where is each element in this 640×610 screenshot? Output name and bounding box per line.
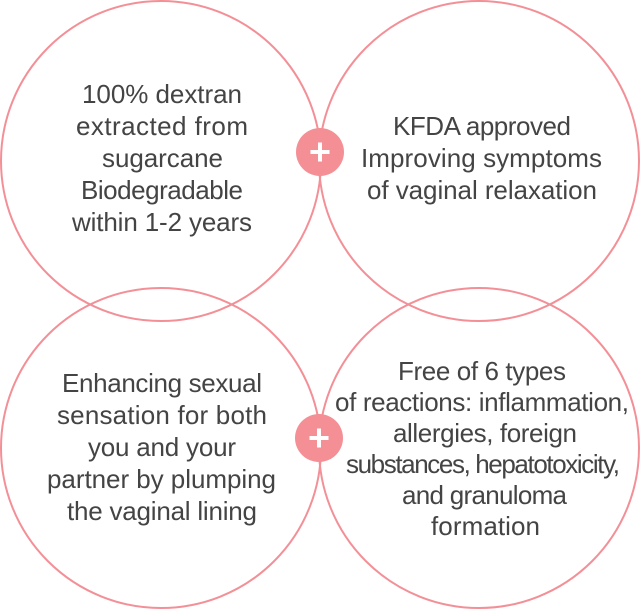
circle: top right bbox=[319, 1, 639, 321]
text block: free of reactions: of reactions: inflammation, bbox=[335, 387, 629, 417]
text block: dextran: extracted from bbox=[76, 111, 248, 141]
text block: KFDA approved: of vaginal relaxation bbox=[367, 175, 597, 205]
text block: sensation: partner by plumping bbox=[47, 464, 276, 494]
text block: KFDA approved: Improving symptoms bbox=[361, 143, 602, 173]
text block: sensation bbox=[47, 368, 276, 526]
text block: KFDA approved: KFDA approved bbox=[393, 111, 571, 141]
text block: dextran bbox=[71, 79, 252, 237]
circle: top left bbox=[1, 1, 321, 321]
icon: top plus badge bbox=[296, 128, 344, 176]
text block: dextran: 100% dextran bbox=[82, 79, 242, 109]
text block: free of reactions: substances, hepatotoxicity, bbox=[346, 449, 620, 479]
text block: sensation: you and your bbox=[88, 432, 236, 462]
icon: bottom plus badge bbox=[295, 414, 343, 462]
text block: dextran: sugarcane bbox=[102, 143, 223, 173]
text block: dextran: within 1-2 years bbox=[71, 207, 252, 237]
text block: free of reactions: Free of 6 types bbox=[398, 356, 566, 386]
text block: free of reactions bbox=[335, 356, 629, 541]
text block: sensation: the vaginal lining bbox=[67, 496, 257, 526]
text block: dextran: Biodegradable bbox=[81, 175, 243, 205]
text block: free of reactions: formation bbox=[431, 511, 540, 541]
text block: sensation: Enhancing sexual bbox=[62, 368, 262, 398]
text block: sensation: sensation for both bbox=[57, 400, 267, 430]
circle: bottom left bbox=[1, 288, 321, 608]
text block: free of reactions: and granuloma bbox=[402, 480, 568, 510]
circle: bottom right bbox=[319, 288, 639, 608]
text block: free of reactions: allergies, foreign bbox=[393, 418, 577, 448]
text block: KFDA approved bbox=[361, 111, 602, 205]
